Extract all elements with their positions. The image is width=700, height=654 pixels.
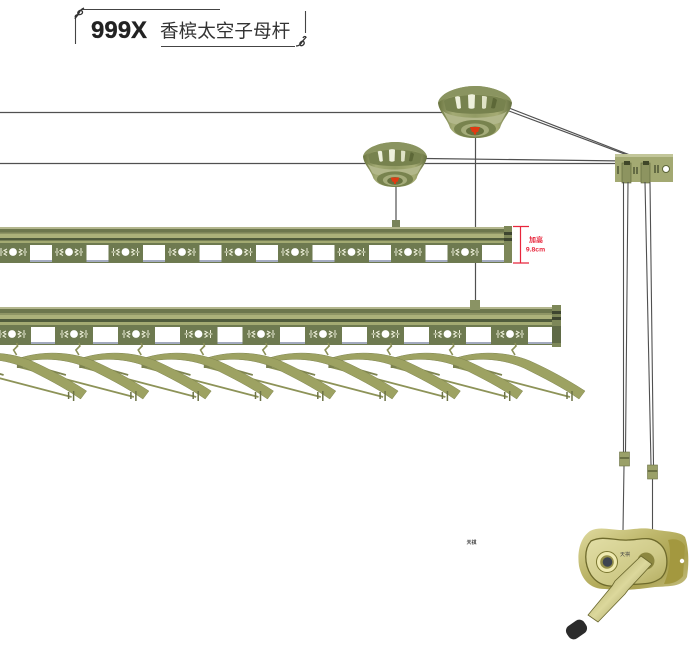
title frame: [75, 8, 306, 46]
title model number: 999X: [91, 17, 147, 44]
upper rail connector: [392, 220, 400, 227]
crank hub: [638, 552, 654, 570]
hangers: [0, 343, 585, 401]
cord clip: left: [620, 452, 630, 466]
crank arm: [588, 556, 652, 622]
lower rail end cap: [552, 305, 561, 347]
upper rail windows: [30, 245, 504, 260]
lower rail connector: [470, 300, 480, 310]
lower rail windows: [31, 327, 553, 342]
lower rail window shadows: [31, 342, 553, 344]
winder right shading: [664, 539, 685, 584]
lift cords: [623, 182, 654, 531]
wall bracket: [615, 154, 673, 183]
title product name: 香槟太空子母杆: [160, 20, 290, 42]
upper rail ornaments: [0, 248, 479, 256]
lower rail: [0, 305, 561, 347]
upper rail window shadows: [30, 260, 504, 262]
hand crank winder: [564, 528, 688, 642]
winder shaft: [596, 552, 618, 572]
main cables: [0, 108, 646, 300]
upper rail: [0, 226, 512, 263]
pulley: small: [363, 142, 427, 187]
small brand mark: 天祺: [466, 539, 477, 546]
height marker: [513, 226, 545, 263]
winder mount hole: [680, 559, 684, 563]
ornament: bottom right: [296, 36, 306, 46]
winder logo: 天祺: [620, 551, 630, 558]
upper rail end cap: [504, 226, 512, 263]
crank knob: [564, 617, 589, 642]
winder base plate: [578, 528, 688, 590]
winder inner plate: [586, 538, 667, 586]
ornament: top left: [75, 8, 84, 19]
pulley: large: [438, 86, 512, 138]
height label: 加高: [529, 235, 543, 244]
lower rail ornaments: [0, 330, 524, 338]
height value: 9.8cm: [526, 246, 545, 254]
cord clip: right: [648, 465, 658, 479]
